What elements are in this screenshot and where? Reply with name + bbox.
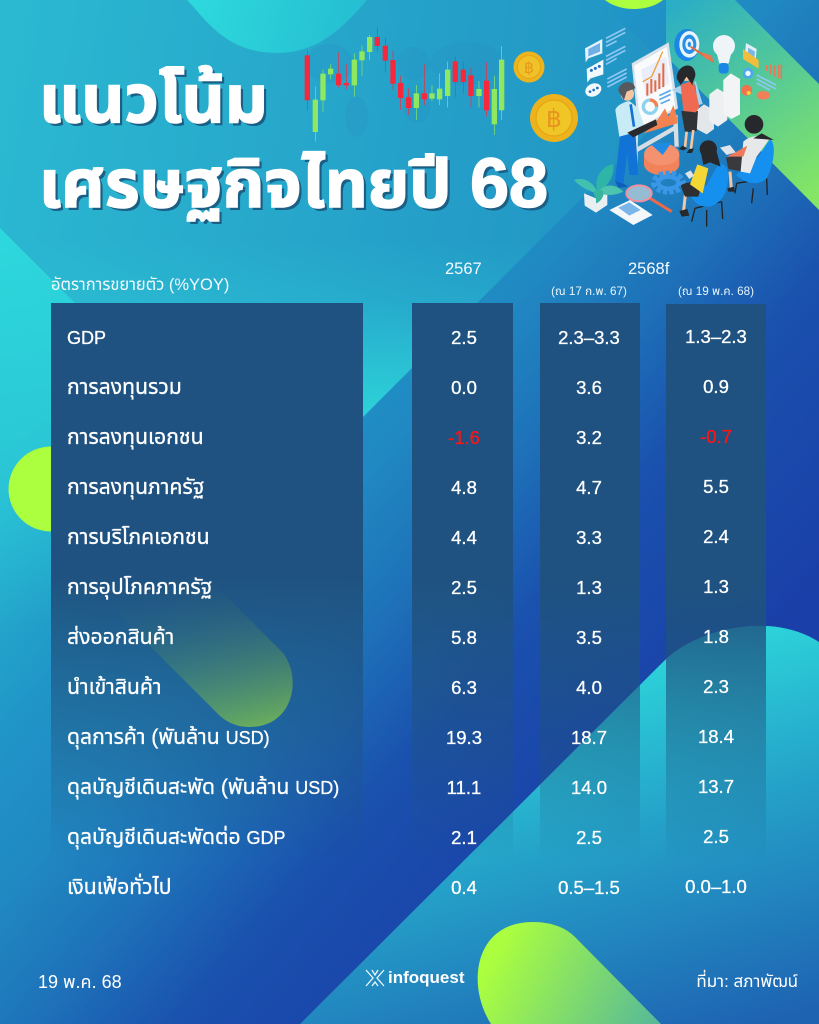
text: 4.7 [576,477,602,498]
row: private investment [67,426,732,450]
text: 2.1 [451,827,477,848]
text: 0.9 [703,376,729,397]
icons: speech bubbles and text lines [583,28,627,99]
icon: small coin: ฿ [524,58,534,77]
row: GDP [67,326,747,348]
candlestick chart with coins [304,27,782,227]
row: public investment [67,476,729,500]
text: 0.0 [451,377,477,398]
icon: magnifying glass [626,185,672,212]
text: 4.4 [451,527,477,548]
panel: column 2568f at 17 Feb 67 [540,303,640,910]
text: ดุลการค้า (พันล้าน USD) [67,726,270,749]
row: imports [67,676,729,699]
text: 2.5 [451,327,477,348]
panel: indicator labels [51,303,363,910]
row: headline inflation [67,874,747,899]
row: government consumption [67,576,729,600]
text: 2.3 [703,676,729,697]
source: ที่มา: สภาพัฒน์ [696,972,798,991]
row: private consumption [67,526,729,549]
presentation board [632,42,678,172]
panel: column 2567 [412,303,513,910]
text: 11.1 [447,777,481,798]
icon: envelope and small charts [741,43,781,100]
text: -0.7 [700,426,732,447]
white bar blocks [697,73,740,134]
text: 0.0–1.0 [685,876,747,897]
text: ดุลบัญชีเดินสะพัด (พันล้าน USD) [67,776,339,799]
title [39,63,549,224]
text: GDP [67,328,106,348]
column sub-header: 17 Feb 67: (ณ 17 ก.พ. 67) [551,285,627,298]
potted plant [574,164,623,213]
text: 3.3 [576,527,602,548]
column sub-header: 19 May 68: (ณ 19 พ.ค. 68) [678,285,754,298]
panel: column 2568f at 19 May 68 [666,304,766,911]
icon: large coin: ฿ [546,104,562,133]
text: 4.8 [451,477,477,498]
row: trade balance [67,726,734,750]
column header 2568f: 2568f [628,260,669,278]
text: 14.0 [571,777,607,798]
icon: gear [655,175,682,191]
text: การลงทุนภาครัฐ [67,476,204,499]
text: แนวโน้ม [39,63,268,137]
text: เงินเฟ้อทั่วไป [67,876,172,899]
text: 2.5 [451,577,477,598]
text: 2.5 [703,826,729,847]
subtitle: growth rate: อัตราการขยายตัว (%YOY) [51,276,229,294]
text: 2.5 [576,827,602,848]
text: ดุลบัญชีเดินสะพัดต่อ GDP [67,826,286,849]
footer date: 19 พ.ค. 68 [38,972,122,992]
seated person left [679,140,728,227]
text: ส่งออกสินค้า [67,626,174,649]
text: 1.3 [576,577,602,598]
text: 1.8 [703,626,729,647]
infoquest logo: infoquest [388,968,464,987]
row: current account [67,776,734,800]
text: 18.7 [571,727,607,748]
text: 6.3 [451,677,477,698]
text: -1.6 [448,427,480,448]
text: 0.5–1.5 [558,877,620,898]
icon: small coin [514,52,544,82]
illustration: business team around a presentation board [574,28,781,227]
text: 1.3 [703,576,729,597]
text: การอุปโภคภาครัฐ [67,576,212,599]
text: 3.2 [576,427,602,448]
icon: target and dart [674,29,713,62]
icon: large coin [530,94,578,142]
text: 13.7 [698,776,734,797]
text: 0.4 [451,877,477,898]
text: 1.3–2.3 [685,326,747,347]
pie chart [644,142,679,175]
text: การบริโภคเอกชน [67,526,210,549]
text: การลงทุนรวม [67,376,182,399]
column header 2567: 2567 [445,260,482,278]
text: การลงทุนเอกชน [67,426,204,449]
presenter woman [673,65,702,153]
text: 3.5 [576,627,602,648]
row: current account to GDP [67,826,729,850]
text: 2.3–3.3 [558,327,620,348]
text: 4.0 [576,677,602,698]
text: เศรษฐกิจไทยปี 68 [39,144,548,222]
text: 3.6 [576,377,602,398]
text: 18.4 [698,726,734,747]
text: 5.5 [703,476,729,497]
presenter man [615,82,657,188]
seated person right [720,115,774,203]
text: 5.8 [451,627,477,648]
text: 2.4 [703,526,729,547]
icon: light bulb [713,35,735,74]
row: total investment [67,376,729,400]
text: นำเข้าสินค้า [67,676,162,699]
row: exports [67,626,729,649]
text: 19.3 [446,727,482,748]
document sheet [609,200,653,225]
